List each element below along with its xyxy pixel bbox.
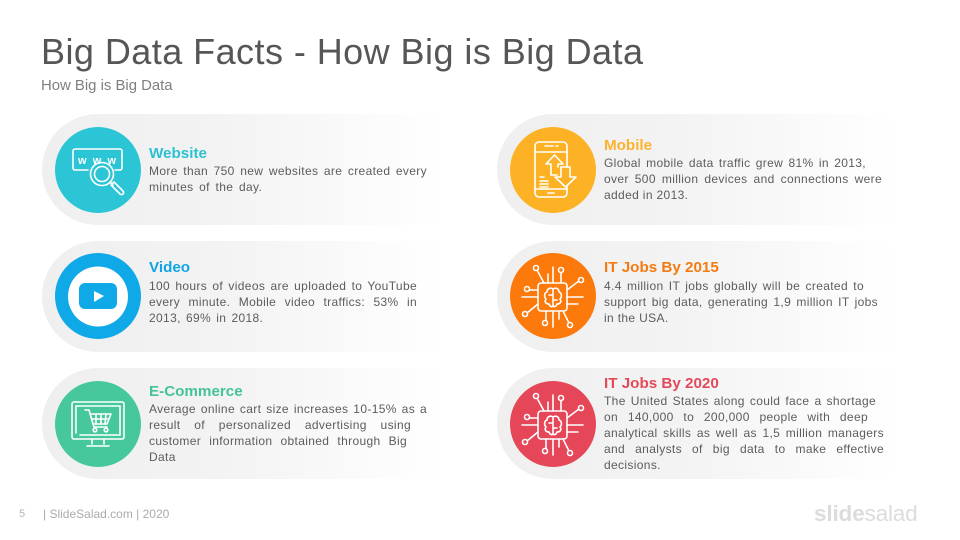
- text: it jobs 2015: in the USA.: [604, 311, 669, 325]
- icon: brain chip: [510, 253, 596, 339]
- heading: video: Video: [149, 259, 190, 276]
- text: website: More than 750 new websites are created every: [149, 164, 427, 178]
- text: mobile: Global mobile data traffic grew 81% in 2013,: [604, 156, 866, 170]
- text: it jobs 2015: [604, 279, 878, 325]
- heading: website: Website: [149, 145, 207, 162]
- text: it jobs 2020: analytical skills as well as 1,5 million managers: [604, 426, 884, 440]
- heading: it jobs 2020: IT Jobs By 2020: [604, 375, 719, 392]
- panel: mobile: [497, 114, 882, 225]
- text: it jobs 2020: and analysts of big data to make effective: [604, 442, 884, 456]
- text: e-commerce: [149, 402, 427, 464]
- text: e-commerce: result of personalized advertising using: [149, 418, 411, 432]
- heading: e-commerce: E-Commerce: [149, 383, 243, 400]
- icon: www search: [55, 127, 141, 213]
- title: Big Data Facts - How Big is Big Data: [41, 31, 643, 72]
- text: e-commerce: Average online cart size increases 10-15% as a: [149, 402, 427, 416]
- icon: brain chip: [510, 381, 596, 467]
- panel background: [42, 368, 442, 479]
- icon: www search: www: [77, 155, 116, 167]
- heading: mobile: Mobile: [604, 137, 652, 154]
- text: mobile: added in 2013.: [604, 188, 688, 202]
- panel background: [42, 114, 442, 225]
- text: it jobs 2020: decisions.: [604, 458, 661, 472]
- panel: e-commerce: [42, 368, 427, 479]
- panel background: [497, 368, 897, 479]
- panel: it jobs 2020: [497, 368, 884, 479]
- text: it jobs 2020: [604, 394, 884, 472]
- icon: mobile transfer: [510, 127, 596, 213]
- page number: 5: [19, 508, 25, 520]
- logo wordmark: slidesalad: [814, 501, 918, 526]
- text: it jobs 2015: support big data, generating 1,9 million IT jobs: [604, 295, 878, 309]
- text: video: every minute. Mobile video traffics: 53% in: [149, 295, 417, 309]
- panel: it jobs 2015: [497, 241, 878, 352]
- text: e-commerce: customer information obtained through Big: [149, 434, 407, 448]
- heading: it jobs 2015: IT Jobs By 2015: [604, 259, 719, 276]
- panel background: [42, 241, 442, 352]
- panel background: [497, 241, 897, 352]
- text: video: 100 hours of videos are uploaded to YouTube: [149, 279, 417, 293]
- text: video: [149, 279, 417, 325]
- text: website: minutes of the day.: [149, 180, 262, 194]
- panel background: [497, 114, 897, 225]
- text: it jobs 2020: on 140,000 to 200,000 people with deep: [604, 410, 868, 424]
- text: mobile: over 500 million devices and connections were: [604, 172, 882, 186]
- icon: shopping cart monitor: [55, 381, 141, 467]
- footer text: | SlideSalad.com | 2020: [43, 507, 169, 521]
- text: website: [149, 164, 427, 194]
- panel: website: [42, 114, 427, 225]
- subtitle: How Big is Big Data: [41, 78, 173, 94]
- text: it jobs 2015: 4.4 million IT jobs globally will be created to: [604, 279, 864, 293]
- text: it jobs 2020: The United States along could face a shortage: [604, 394, 876, 408]
- text: e-commerce: Data: [149, 450, 176, 464]
- icon: video play: [55, 253, 141, 339]
- text: mobile: [604, 156, 882, 202]
- text: video: 2013, 69% in 2018.: [149, 311, 263, 325]
- panel: video: [42, 241, 417, 352]
